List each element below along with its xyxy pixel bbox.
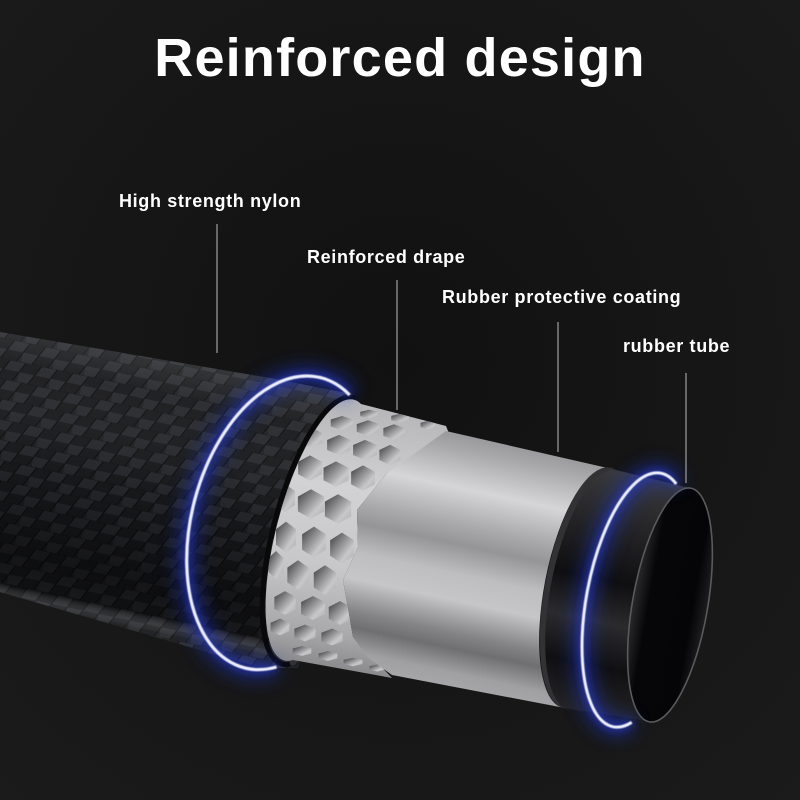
leader lines [217,224,686,483]
panel: silver rubber protective coating [343,431,620,710]
title: Reinforced design [154,28,646,88]
panel: perforated hexagon sleeve [262,397,450,678]
hose illustration [0,224,714,748]
tube opening [612,482,728,728]
label: rubber protective coating: Rubber protective coating [442,287,681,307]
blue ring on braid [187,376,350,670]
label: high strength nylon: High strength nylon [119,191,301,211]
label: reinforced drape: Reinforced drape [307,247,465,267]
blue ring on tube [582,473,676,727]
panel: inner rubber tube [539,468,728,728]
label: rubber tube: rubber tube [623,336,730,356]
panel: braided nylon layer [0,332,352,668]
hexagon perforations [268,410,436,672]
